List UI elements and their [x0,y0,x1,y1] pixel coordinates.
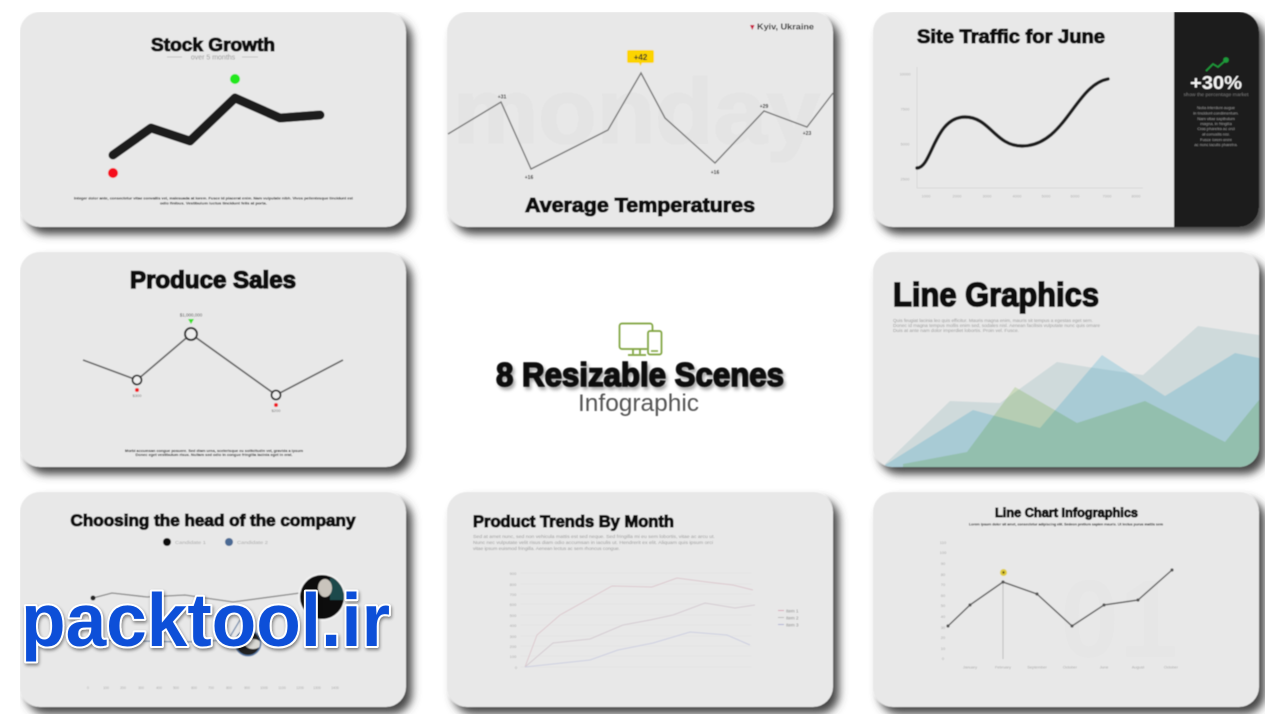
line chart: product trends: 100 [510,654,517,659]
side panel text: Cras pharetra ac orci [1197,126,1235,131]
caption: stock growth [74,196,354,206]
line chart: 60 [941,593,946,598]
side panel text: Nulla interdum augue [1197,105,1236,110]
line chart: October [1063,664,1078,670]
legend: Candidate 1 [175,540,207,545]
x axis labels: 600 [191,686,197,690]
text block: product trends: Sed at amet nunc, sed non vehicula mattis est sed neque. Sed fringilla mi eu sem lobortis, vitae ac arcu ut. [473,534,715,539]
heading: site traffic: Site Traffic for June [917,27,1105,48]
x axis labels: 400 [156,686,162,690]
photo: candidate 2 [234,630,262,656]
panel: site traffic [873,12,1265,234]
line chart: 80 [941,572,946,577]
x axis labels: 300 [138,686,144,690]
text block: line graphics: Duis at ante nam dolor imperdiet lobortis. Proin vel. Fusce. [893,328,1019,333]
location label: Kyiv, Ukraine [757,22,815,32]
x axis labels: 1200 [296,686,304,690]
panel: average temperatures [447,12,839,234]
line chart: product trends: 700 [510,592,517,597]
icon: devices [620,324,662,355]
subheading: over 5 months: over 5 months [191,54,236,62]
side panel text: at convallis nisi. [1202,132,1230,136]
line chart: 10 [941,646,946,651]
line chart: product trends: 400 [510,623,517,628]
line chart: traffic: 8000 [1132,194,1141,198]
line chart: February [995,664,1011,670]
text block: line graphics: Donec id magna tempus mollis enim sed, sodales nisl. Aenean facilisis vulputate nunc quis ornare [893,323,1101,328]
line chart: traffic [899,67,1143,198]
data labels: +31 [498,94,506,100]
x axis labels: 500 [173,686,179,690]
line chart: product trends: 300 [510,634,517,639]
photo: candidate 1 [298,573,348,622]
text block: product trends: Nunc nec vulputate velit risus diam odio accumsan in iaculis ut. Hendrerit ex elit. Aliquam quis ipsum orci [473,540,713,545]
title: 8 resizable scenes: 8 Resizable Scenes [496,356,784,393]
area chart: layered [885,269,1260,468]
x axis labels: 0 [87,686,89,690]
line chart: traffic: 6000 [1071,194,1080,198]
side panel text: magna, in fringilla [1200,121,1232,126]
heading: choosing the head: Choosing the head of the company [70,511,356,530]
line chart: traffic: 7000 [1103,194,1112,198]
line chart: January [963,664,977,670]
legend: Candidate 2 [237,540,269,545]
center block: title [496,324,784,417]
watermark: packtool.ir: packtool.ir [21,578,390,662]
label: low value 2 [272,403,281,413]
marker: high point [230,74,240,84]
panel: stock growth [20,12,412,234]
legend: Item 3 [786,622,799,628]
caption: stock growth: Integer dolor ante, consectetur vitae convallis vel, malesuada at lorem. Fusce id placerat enim. Nam vulputate nibh. Vivos pellentesque tincidunt est [74,196,354,200]
label: low value 2: $200 [272,408,281,413]
line chart: candidates [90,593,300,642]
caption: stock growth: odio finibus. Vestibulum luctus tincidunt felis at porta. [160,200,267,206]
line chart: August [1132,664,1145,670]
heading: product trends: Product Trends By Month [473,512,674,531]
heading: line graphics: Line Graphics [893,276,1099,313]
text block: line graphics [893,318,1101,333]
line chart: traffic: 5000 [901,142,910,146]
data labels: +29 [760,104,768,110]
line chart: product trends: 200 [510,644,517,649]
data labels: +16 [525,175,533,181]
x axis labels: 1300 [313,686,321,690]
text block: product trends: vitae ipsum euismod fringilla. Aenean lectus ac sem rhoncus congue. [473,546,620,551]
x axis labels: 900 [244,686,250,690]
x axis labels: 100 [103,686,109,690]
x axis labels [87,686,339,690]
heading: average temperatures: Average Temperatures [525,195,755,217]
x axis labels: 1100 [278,686,286,690]
line chart [940,540,1179,670]
legend: Item 2 [786,616,799,620]
stat caption: show the percentage market [1184,92,1249,97]
panel: line graphics [873,252,1265,474]
panel: product trends [447,492,839,714]
side panel text: ac nunc iaculis pharetra. [1194,142,1238,147]
line chart: 50 [941,603,946,608]
line chart: product trends: 900 [510,571,517,576]
legend [163,538,269,546]
label: low value 1 [133,388,142,398]
line chart: stock growth [113,98,320,155]
callout: peak +42 [627,50,654,66]
marker: low point [108,168,118,178]
data labels: +16 [711,170,719,176]
line chart: traffic: 1000 [922,194,931,198]
heading: stock growth: Stock Growth [151,35,275,55]
x axis labels: 800 [226,686,232,690]
watermark: monday: monday [453,61,820,163]
heading: produce sales: Produce Sales [130,267,296,294]
text block: line graphics: Quis feugiat lacinia leo quis efficitur. Mauris magna enim, mauris sit tempus a egestas eget sem. [893,318,1093,323]
line chart: 70 [941,582,946,587]
x axis labels: 1400 [331,686,339,690]
side panel text: in tincidunt condimentum. [1193,110,1239,116]
subtitle: infographic: Infographic [578,390,699,417]
panel: choosing the head [20,492,412,714]
line chart: traffic: 2500 [901,176,910,182]
caption: produce sales: Morbi accumsan congue posuere. Sed diam urna, scelerisque eu sollicitudin vel, gravida a ipsum [125,448,303,453]
text block: product trends [473,534,715,551]
caption: produce sales: Donec eget vestibulum risus. Nullam sed odio in congue fringilla lacinia eget in erat. [136,452,292,457]
side panel text: Fusce lorem enim [1200,137,1233,142]
panel: line chart infographics [873,492,1265,714]
line chart: product trends: 800 [510,582,517,587]
line chart: product trends: 0 [515,665,518,670]
x axis labels: 1000 [260,686,268,690]
caption: produce sales [125,448,303,457]
line chart: 100 [940,550,947,555]
subheading: Lorem ipsum dolor sit amet, consectetur adipiscing elit. Sedeon pretium sapien mauris. Ut lectus purus mattis sem [969,522,1163,526]
label: low value 1: $300 [133,393,142,398]
line chart: product trends [510,571,755,670]
line chart: traffic: 3000 [983,194,992,198]
line chart: traffic: 2000 [953,194,962,198]
line chart: 40 [941,614,946,619]
line chart: October [1164,664,1179,670]
side panel: dark summary [1174,12,1259,227]
label: peak value: $1,000,000 [180,312,203,318]
stat: +30%: +30% [1190,73,1242,93]
data labels [498,94,811,181]
line chart: traffic: 10000 [899,72,911,76]
line chart: 0 [942,656,945,661]
subheading: over 5 months [167,54,258,62]
line chart: 110 [940,540,947,545]
line chart: traffic: 5000 [1042,194,1051,198]
legend [778,608,799,628]
data labels: +23 [803,131,811,137]
side panel text: Nam vitae sapibulum [1197,116,1235,121]
x axis labels: 200 [120,686,126,690]
legend: Item 1 [786,608,799,614]
line chart: 90 [941,561,946,566]
line chart: produce sales [83,328,343,400]
side panel text [1193,105,1239,147]
label: peak value [180,312,203,324]
line chart: traffic: 7500 [901,106,910,112]
line chart: traffic: 4000 [1013,194,1022,198]
line chart: 20 [941,635,946,640]
line chart: June [1100,664,1109,670]
icon: growth arrow [1206,57,1229,71]
panel: produce sales [20,252,412,474]
heading: line chart infographics: Line Chart Infographics [995,505,1138,520]
x axis labels: 700 [208,686,214,690]
watermark: 01: 01 [1060,558,1178,681]
callout: peak +42: +42 [634,53,648,62]
line chart: product trends: 500 [510,613,517,618]
line chart: product trends: 600 [510,602,517,607]
line chart: temperatures [448,73,833,169]
line chart: 30 [941,625,946,630]
line chart: September [1027,664,1047,670]
